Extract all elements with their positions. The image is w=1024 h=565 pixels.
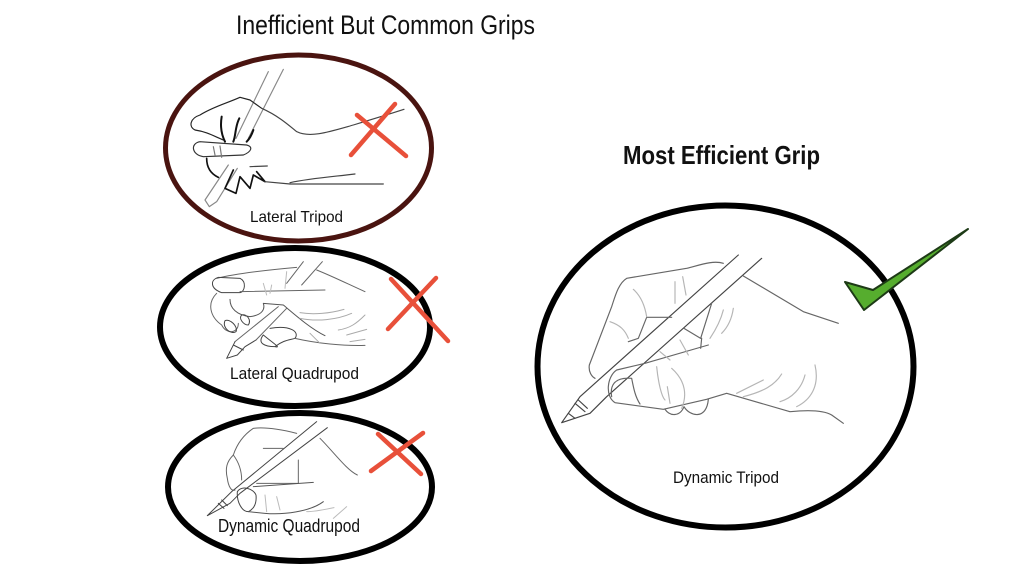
oval outline: lateral tripod xyxy=(166,55,432,241)
icon: hand dynamic tripod xyxy=(562,255,843,423)
icon: hand dynamic quadrupod xyxy=(207,422,357,518)
panel: dynamic quadrupod xyxy=(168,413,432,561)
icon: green check mark xyxy=(845,229,968,310)
icon: hand lateral tripod xyxy=(191,69,404,207)
panel: lateral quadrupod xyxy=(160,248,448,406)
oval outline: dynamic quadrupod xyxy=(168,413,432,561)
icon: hand lateral quadrupod xyxy=(211,262,367,358)
oval outline: dynamic tripod xyxy=(538,206,914,528)
label: dynamic tripod: Dynamic Tripod xyxy=(673,468,779,487)
label: lateral tripod: Lateral Tripod xyxy=(250,209,343,226)
label: dynamic quadrupod: Dynamic Quadrupod xyxy=(218,516,360,536)
title: inefficient grips: Inefficient But Common Grips xyxy=(236,10,535,40)
icon: red cross xyxy=(388,278,448,341)
panel: lateral tripod xyxy=(166,55,432,241)
label: lateral quadrupod: Lateral Quadrupod xyxy=(230,364,359,383)
panel: dynamic tripod xyxy=(538,206,968,528)
icon: red cross xyxy=(371,433,423,474)
title: most efficient grip: Most Efficient Grip xyxy=(623,140,820,170)
icon: red cross xyxy=(351,104,406,156)
oval outline: lateral quadrupod xyxy=(160,248,430,406)
